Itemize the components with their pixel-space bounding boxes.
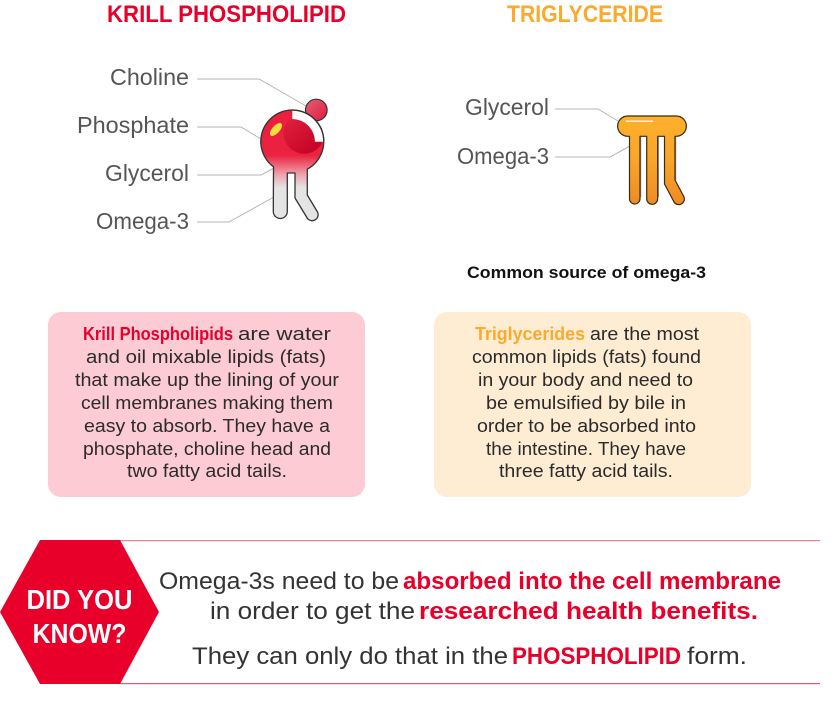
callout line 1: absorbed into the cell membrane [403,568,781,595]
choline ball [306,99,327,121]
panel text: in your body and need to [478,370,693,390]
leader lines: triglyceride [555,109,630,157]
phosphate head and tails [261,110,324,221]
callout line 2: researched health benefits. [419,598,758,625]
panel text [472,324,701,481]
callout: did you know [0,540,820,684]
panel text: that make up the lining of your [75,370,339,390]
yellow highlight [268,121,284,138]
head outline arc [292,110,324,142]
label: omega-3: Omega-3 [96,208,189,234]
panel: krill phospholipids [48,312,365,497]
label: phosphate: Phosphate [77,112,189,138]
caption: common source: Common source of omega-3 [467,263,706,282]
icon: triglyceride molecule [618,116,686,205]
heading: triglyceride: TRIGLYCERIDE [507,1,663,28]
callout line 2: in order to get the [210,598,415,625]
callout rules [120,540,820,684]
callout line 1: Omega-3s need to be [159,568,399,595]
callout line 3: form. [687,643,747,670]
panel text: two fatty acid tails. [127,461,287,481]
panel text [75,324,339,481]
callout line 3 [192,643,747,670]
hexagon badge: KNOW? [32,618,126,649]
panel text: Triglycerides [475,324,585,344]
label: choline: Choline [110,64,189,90]
panel text: are water [238,324,331,344]
panel text: order to be absorbed into [477,416,696,436]
callout line 3: They can only do that in the [192,643,508,670]
panel: triglycerides [434,312,751,497]
callout line 1 [159,568,781,595]
panel text: and oil mixable lipids (fats) [86,347,326,367]
panel text: three fatty acid tails. [499,461,673,481]
panel text: the intestine. They have [486,439,686,459]
panel text: Krill Phospholipids [83,324,233,344]
panel text: phosphate, choline head and [83,439,331,459]
label: omega-3 (triglyceride): Omega-3 [457,143,549,169]
panel text: are the most [590,324,699,344]
hexagon badge: DID YOU [26,584,132,615]
panel text: easy to absorb. They have a [84,416,331,436]
callout line 2 [210,598,758,625]
heading: krill phospholipid: KRILL PHOSPHOLIPID [107,1,346,28]
callout line 3: PHOSPHOLIPID [512,643,681,670]
icon: krill phospholipid molecule [261,99,327,221]
label: glycerol (triglyceride): Glycerol [465,94,549,120]
label: glycerol: Glycerol [105,160,189,186]
leader lines: krill [197,79,306,222]
panel text: be emulsified by bile in [486,393,686,413]
inner shading [283,118,323,154]
panel text: cell membranes making them [81,393,333,413]
white highlight [292,111,323,142]
hexagon badge [0,540,159,684]
tail shadows [640,137,676,197]
highlight [626,120,653,122]
panel text: common lipids (fats) found [472,347,701,367]
